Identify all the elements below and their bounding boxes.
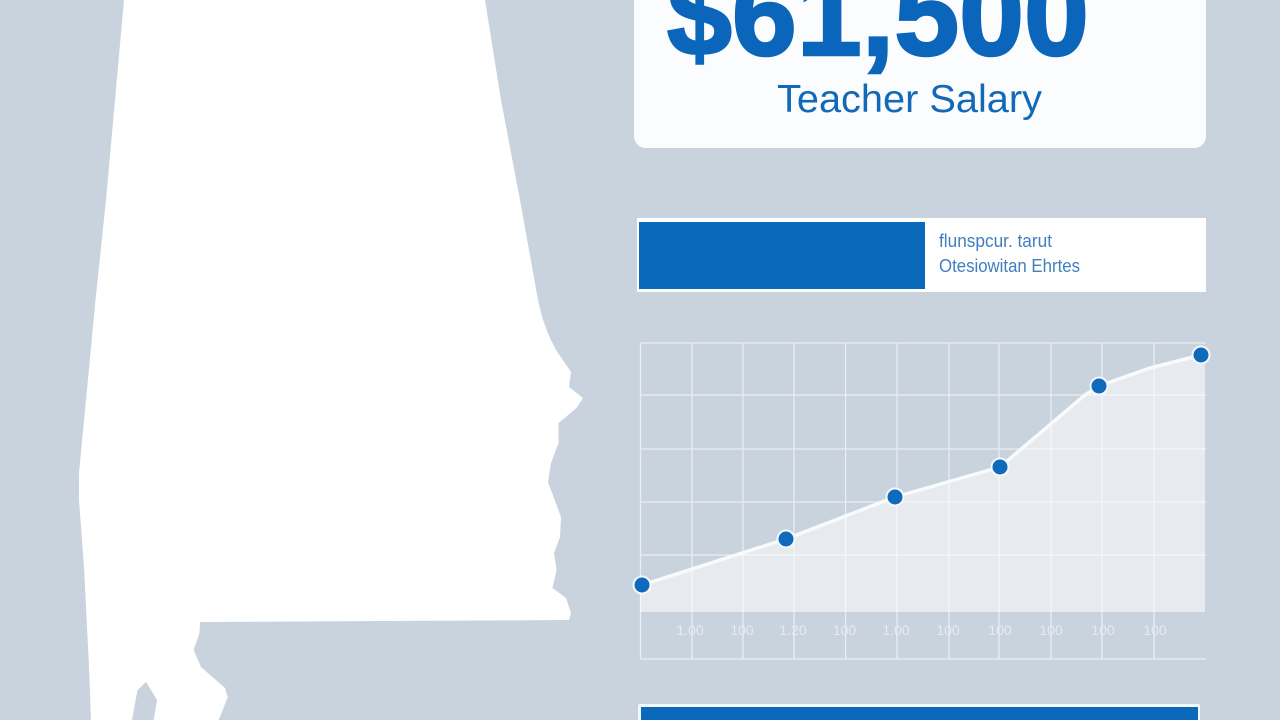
panel: teacher salary card [634,0,1206,148]
data points [634,346,1210,594]
axis labels: 1.00 [882,622,910,638]
axis labels: 100 [936,622,960,638]
bottom bar [638,704,1200,720]
panel: progress bar with caption [637,218,1206,292]
axis labels: 100 [988,622,1012,638]
line chart [634,343,1210,659]
axis labels [676,622,1167,638]
trend line [642,355,1201,585]
bar caption: flunspcur. tarut [939,231,1052,251]
state silhouette map [79,0,583,720]
bar fill [639,222,925,289]
axis labels: 1.20 [779,622,807,638]
bar caption [939,231,1080,276]
axis labels: 100 [1091,622,1115,638]
salary label: Teacher Salary [777,78,1042,121]
axis labels: 1.00 [676,622,704,638]
axis labels: 100 [1143,622,1167,638]
axis labels: 100 [833,622,856,638]
axis labels: 100 [1039,622,1063,638]
bar caption: Otesiowitan Ehrtes [939,256,1080,276]
axis labels: 100 [730,622,754,638]
chart area fill [640,355,1205,612]
